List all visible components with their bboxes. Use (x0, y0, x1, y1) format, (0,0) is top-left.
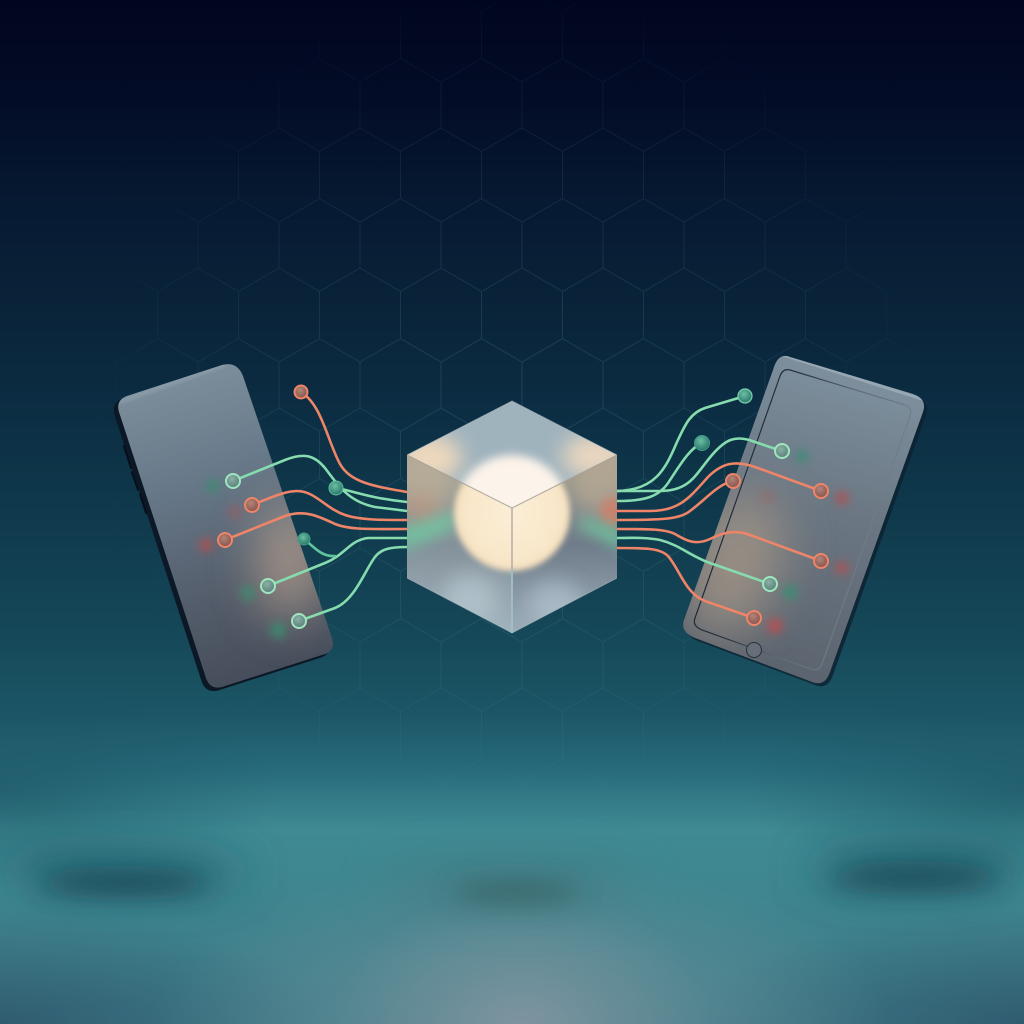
red wire top (301, 392, 407, 492)
left phone blurred screen dots (199, 479, 286, 638)
home button (746, 642, 762, 658)
green wire four (617, 538, 770, 584)
frosted glass cube (406, 400, 618, 634)
right phone (683, 356, 927, 686)
hexagon grid backdrop (166, 34, 858, 700)
red wire two (617, 481, 733, 520)
green wire three (617, 438, 782, 491)
cube inner glow right (512, 482, 574, 575)
red wire one (617, 463, 821, 511)
floor glow (150, 855, 894, 1024)
right phone blurred screen dots (760, 449, 849, 634)
phone dark edge (114, 367, 329, 691)
right wires (617, 396, 821, 618)
left wires (225, 392, 407, 621)
green wire short (304, 539, 335, 556)
red wire three (617, 529, 821, 561)
side buttons (124, 446, 146, 513)
red wire three (225, 513, 407, 540)
cube top face (407, 401, 617, 508)
phone body (683, 356, 924, 684)
floor edge vignette (0, 690, 1024, 1024)
cube left face (407, 455, 512, 632)
floor shadows (0, 852, 1024, 905)
cube inner glow (450, 482, 512, 574)
right wire end nodes (694, 389, 828, 625)
left phone (114, 364, 333, 692)
cube edges (407, 401, 617, 633)
phone glass (118, 364, 333, 688)
green wire top (617, 396, 745, 491)
green wire to floating dot (336, 488, 407, 502)
red wire four (617, 548, 754, 618)
red wire two (252, 491, 407, 520)
green wire two (617, 443, 702, 501)
left wire end nodes (218, 386, 343, 628)
phone drop edge (686, 359, 927, 686)
green wire one (233, 456, 407, 511)
phone inner bezel (694, 370, 911, 670)
green wire five (299, 547, 407, 621)
cube right face (512, 455, 617, 632)
green wire four (268, 538, 407, 586)
